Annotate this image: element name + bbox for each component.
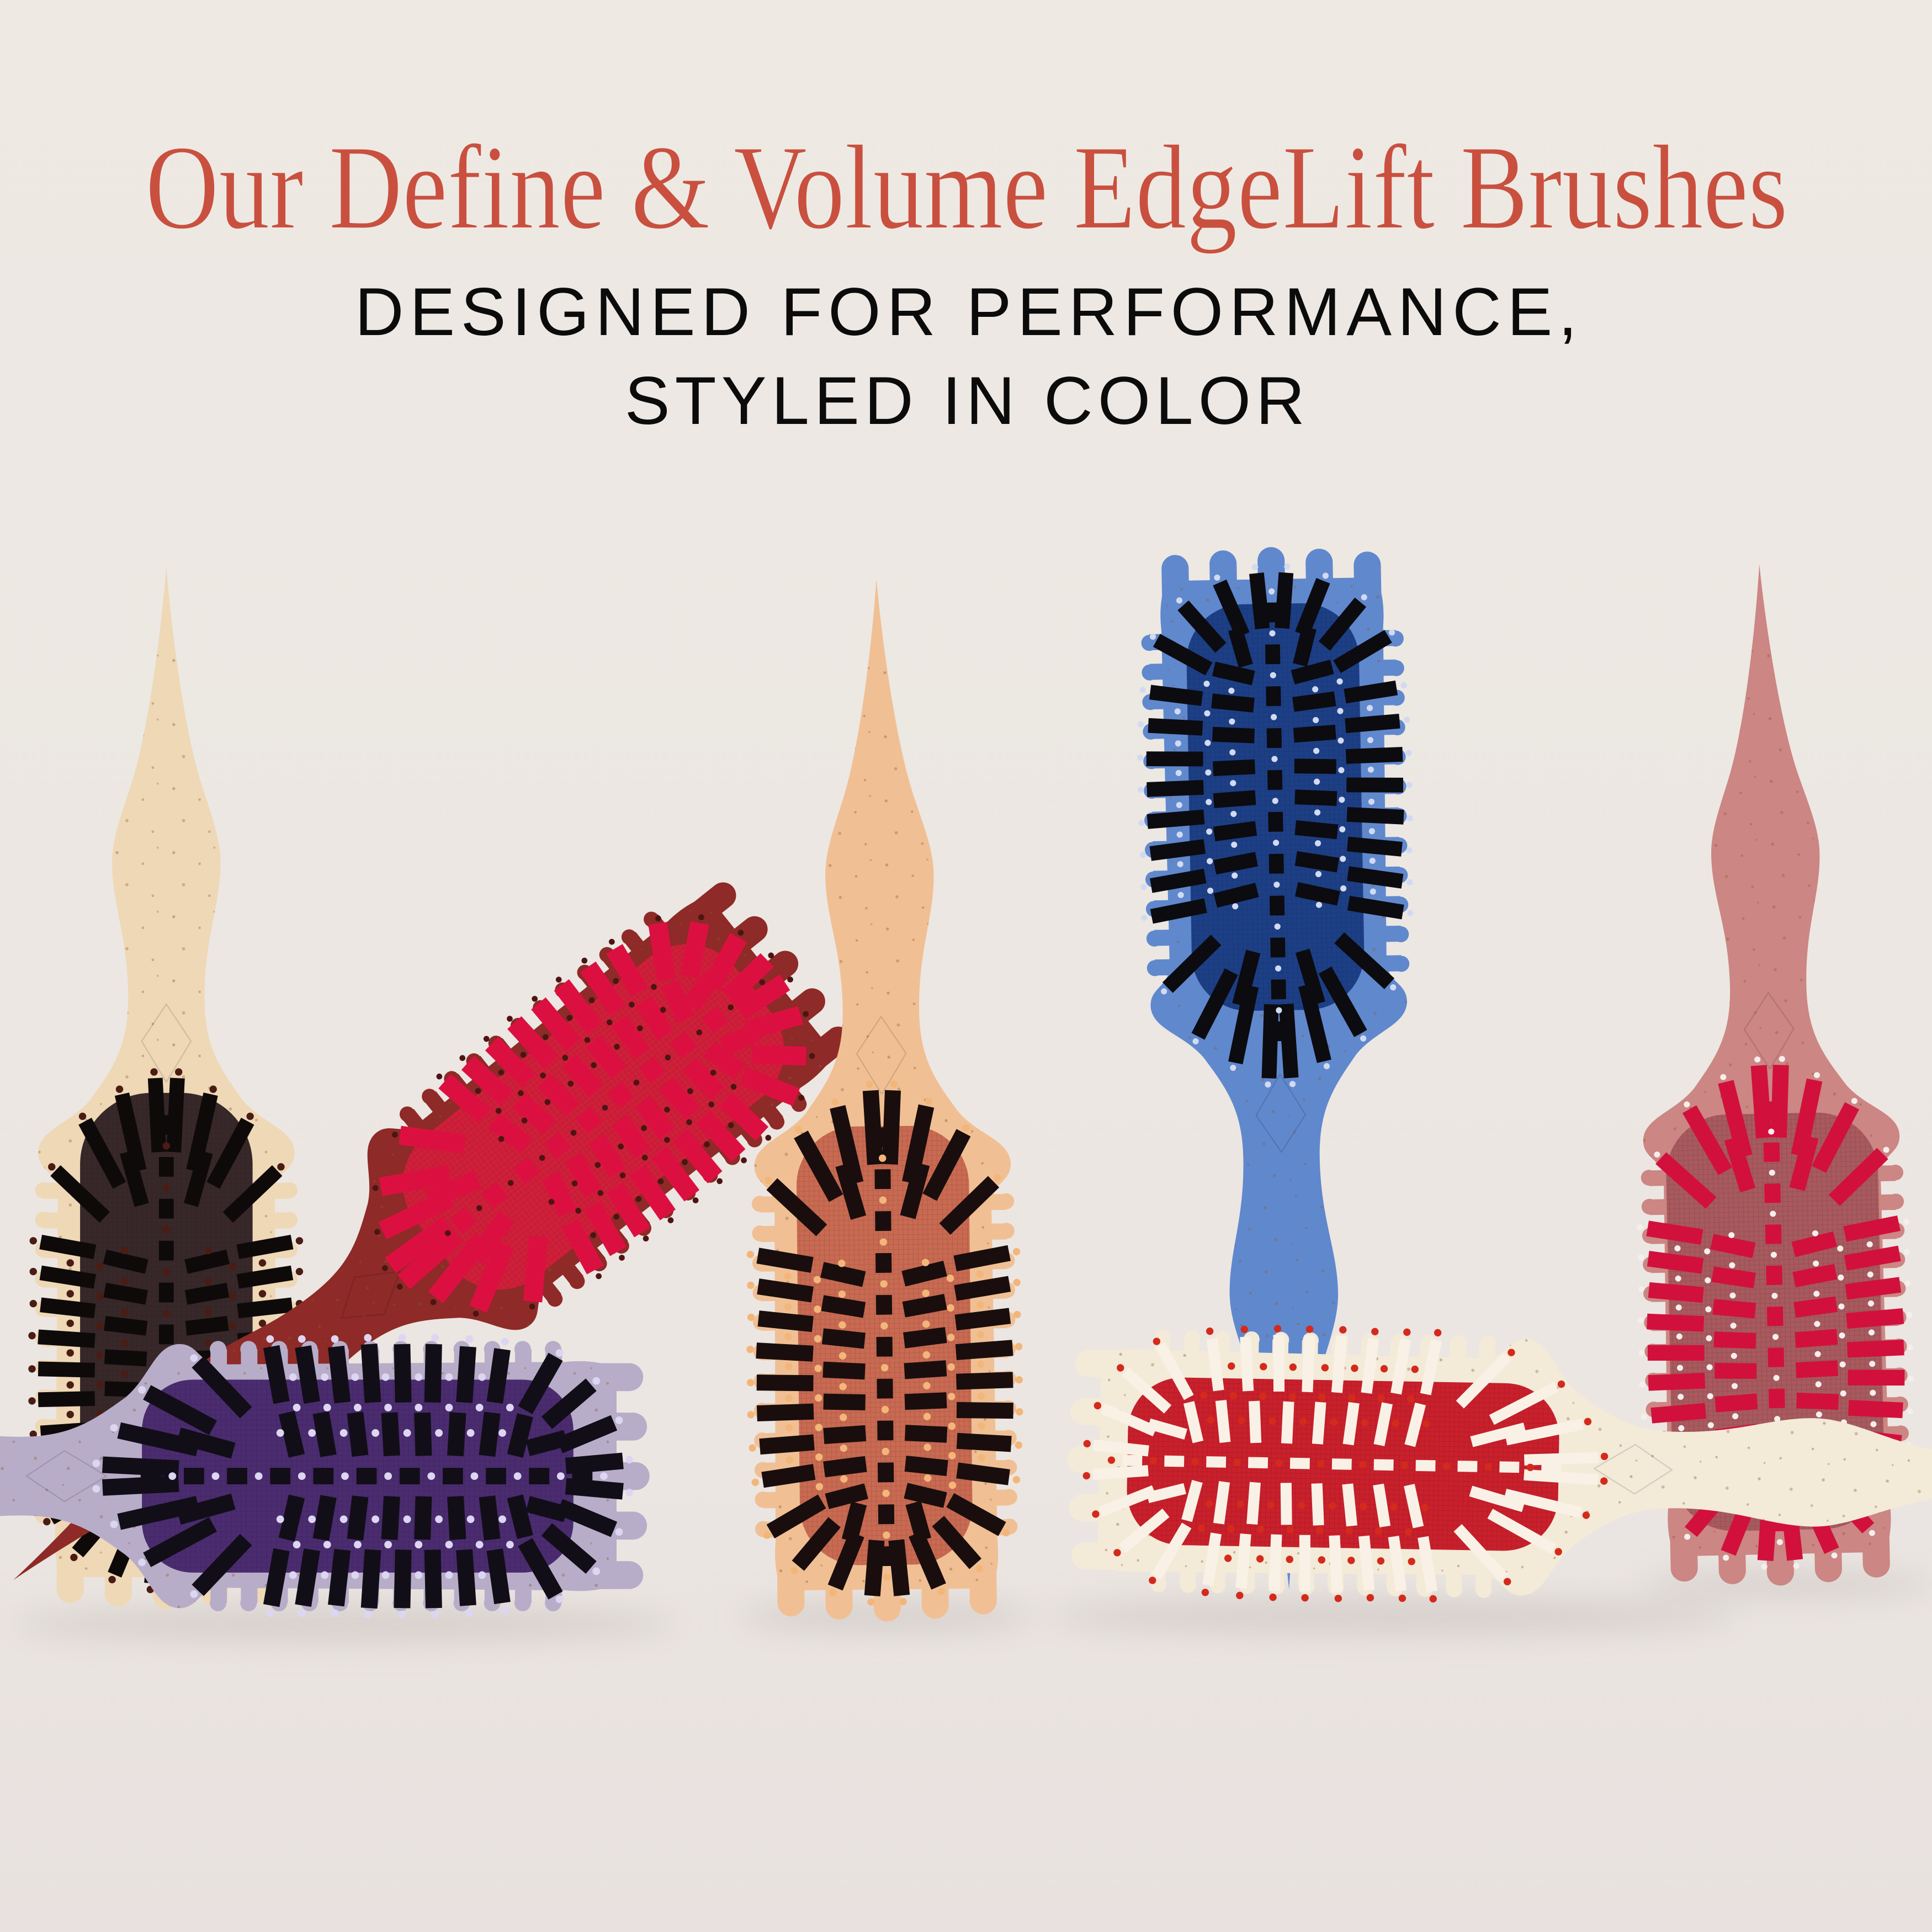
brush: peach upright — [742, 578, 1022, 1609]
subtitle — [355, 274, 1577, 439]
brush: lavender horizontal — [0, 1337, 635, 1615]
subtitle: STYLED IN COLOR — [625, 363, 1305, 439]
brush: cream horizontal with red pad — [1078, 1325, 1932, 1612]
brush: beige with black bristles — [32, 567, 301, 1596]
subtitle: DESIGNED FOR PERFORMANCE, — [355, 274, 1577, 350]
brush: crimson tilted — [0, 863, 866, 1681]
brush: rose with red bristles — [1625, 561, 1915, 1575]
floor shadow — [12, 1572, 1932, 1641]
brush: blue inverted — [1137, 558, 1423, 1591]
